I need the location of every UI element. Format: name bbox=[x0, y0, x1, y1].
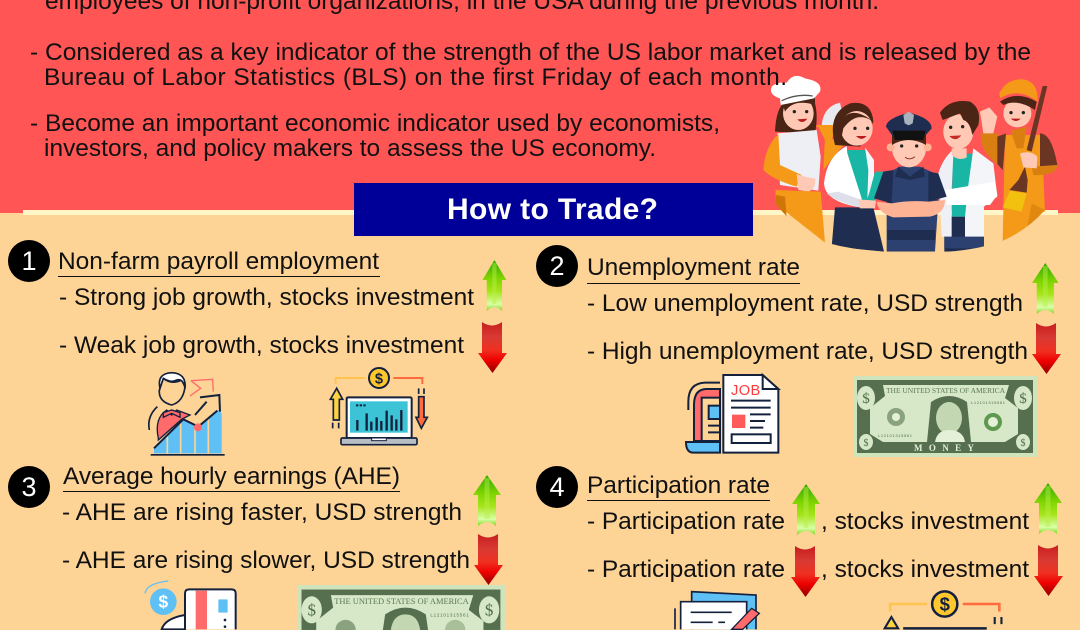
bullet: participation rate rising: - Participation rate bbox=[587, 508, 785, 535]
icon: laptop with up and down arrows: $ bbox=[375, 371, 383, 387]
icon: credit card and dollar coin bbox=[145, 581, 236, 629]
arrow up bbox=[473, 475, 501, 527]
icon: dollar bill partly cropped bbox=[297, 585, 505, 630]
number badge 4: 4 bbox=[549, 472, 565, 502]
arrow up inline bbox=[792, 484, 820, 536]
panel 3: average hourly earnings bbox=[8, 463, 505, 630]
icon: dollar bill partly cropped: $ bbox=[307, 601, 316, 620]
icon: laptop with arrows partly cropped: $ bbox=[940, 594, 951, 615]
heading 2: Unemployment rate bbox=[587, 254, 800, 281]
text block: definition of non-farm payrolls: - Become an important economic indicator used by economists, bbox=[30, 110, 720, 137]
bullet: participation rate rising: , stocks investment bbox=[821, 508, 1029, 535]
number badge 4 bbox=[536, 466, 578, 508]
bullet: weak job growth: - Weak job growth, stocks investment bbox=[59, 332, 464, 359]
panel: red definition header bbox=[0, 0, 1080, 213]
icon: laptop with up and down arrows bbox=[330, 368, 427, 445]
number badge 1: 1 bbox=[21, 246, 37, 276]
bullet: participation rate falling: - Participation rate bbox=[587, 556, 785, 583]
police officer bbox=[874, 112, 947, 252]
text block: definition of non-farm payrolls bbox=[30, 0, 1031, 162]
icon: document and pen bbox=[675, 592, 759, 629]
arrow down bbox=[478, 322, 507, 373]
bullet: participation rate falling bbox=[587, 556, 1029, 583]
panel 4: participation rate bbox=[536, 466, 1063, 629]
icon: dollar bill: $ bbox=[864, 438, 868, 449]
heading 4: Participation rate bbox=[587, 472, 770, 499]
icon: dollar bill partly cropped: THE UNITED STATES OF AMERICA bbox=[334, 596, 470, 606]
icon: laptop with arrows partly cropped bbox=[885, 591, 1001, 628]
text block: definition of non-farm payrolls: investors, and policy makers to assess the US economy. bbox=[44, 135, 656, 162]
doctor man bbox=[938, 101, 997, 252]
number badge 3 bbox=[8, 466, 50, 508]
text block: definition of non-farm payrolls: - Considered as a key indicator of the strength of the US labor market and is released by the bbox=[30, 39, 1031, 66]
arrow down bbox=[1032, 323, 1061, 374]
icon: job listing bbox=[686, 375, 778, 453]
arrow up bbox=[482, 260, 506, 312]
heading 3: Average hourly earnings (AHE) bbox=[63, 463, 400, 490]
heading: How to Trade? bbox=[354, 183, 753, 236]
icon: dollar bill partly cropped: $ bbox=[485, 601, 493, 620]
chef bbox=[763, 76, 845, 243]
icon: dollar bill bbox=[853, 376, 1037, 457]
illustration: group of workers bbox=[763, 76, 1058, 252]
bullet: AHE rising slower: - AHE are rising slower, USD strength bbox=[62, 547, 470, 574]
bullet: participation rate falling: , stocks investment bbox=[821, 556, 1029, 583]
icon: dollar bill: MONEY bbox=[914, 443, 974, 453]
icon: dollar bill: $ bbox=[862, 391, 870, 407]
arrow down bbox=[474, 534, 503, 585]
panel 1: non-farm payroll employment bbox=[8, 240, 507, 456]
heading 1: Non-farm payroll employment bbox=[58, 248, 379, 275]
icon: businessman with growth chart bbox=[149, 373, 225, 456]
heading: How to Trade?: How to Trade? bbox=[447, 193, 658, 226]
number badge 3: 3 bbox=[21, 472, 37, 502]
bullet: strong job growth: - Strong job growth, stocks investment bbox=[59, 284, 474, 311]
cream divider strip bbox=[23, 210, 1058, 215]
number badge 2 bbox=[536, 245, 578, 287]
arrow up right bbox=[1034, 483, 1062, 535]
number badge 2: 2 bbox=[549, 251, 565, 281]
icon: job listing: JOB bbox=[731, 383, 760, 399]
icon: dollar bill: L12101315561 bbox=[878, 433, 913, 438]
cleaning worker bbox=[980, 79, 1058, 241]
icon: credit card and dollar coin: $ bbox=[159, 592, 169, 612]
bullet: AHE rising faster: - AHE are rising faster, USD strength bbox=[62, 499, 462, 526]
icon: dollar bill: L12101315561 bbox=[971, 400, 1006, 405]
doctor woman bbox=[824, 103, 884, 252]
panel 2: unemployment rate bbox=[536, 245, 1061, 457]
bullet: low unemployment: - Low unemployment rate, USD strength bbox=[587, 290, 1023, 317]
arrow down right bbox=[1034, 545, 1063, 596]
text block: definition of non-farm payrolls: Bureau of Labor Statistics (BLS) on the first Friday of each month. bbox=[44, 64, 787, 91]
bullet: participation rate rising bbox=[587, 508, 1029, 535]
arrow down inline bbox=[791, 546, 820, 597]
icon: dollar bill: THE UNITED STATES OF AMERICA bbox=[886, 386, 1006, 395]
number badge 1 bbox=[8, 240, 50, 282]
icon: dollar bill: $ bbox=[1019, 391, 1027, 407]
icon: dollar bill: $ bbox=[1020, 438, 1026, 449]
bullet: high unemployment: - High unemployment rate, USD strength bbox=[587, 338, 1028, 365]
arrow up bbox=[1032, 263, 1059, 315]
icon: dollar bill partly cropped: L12101315561 bbox=[430, 613, 469, 618]
